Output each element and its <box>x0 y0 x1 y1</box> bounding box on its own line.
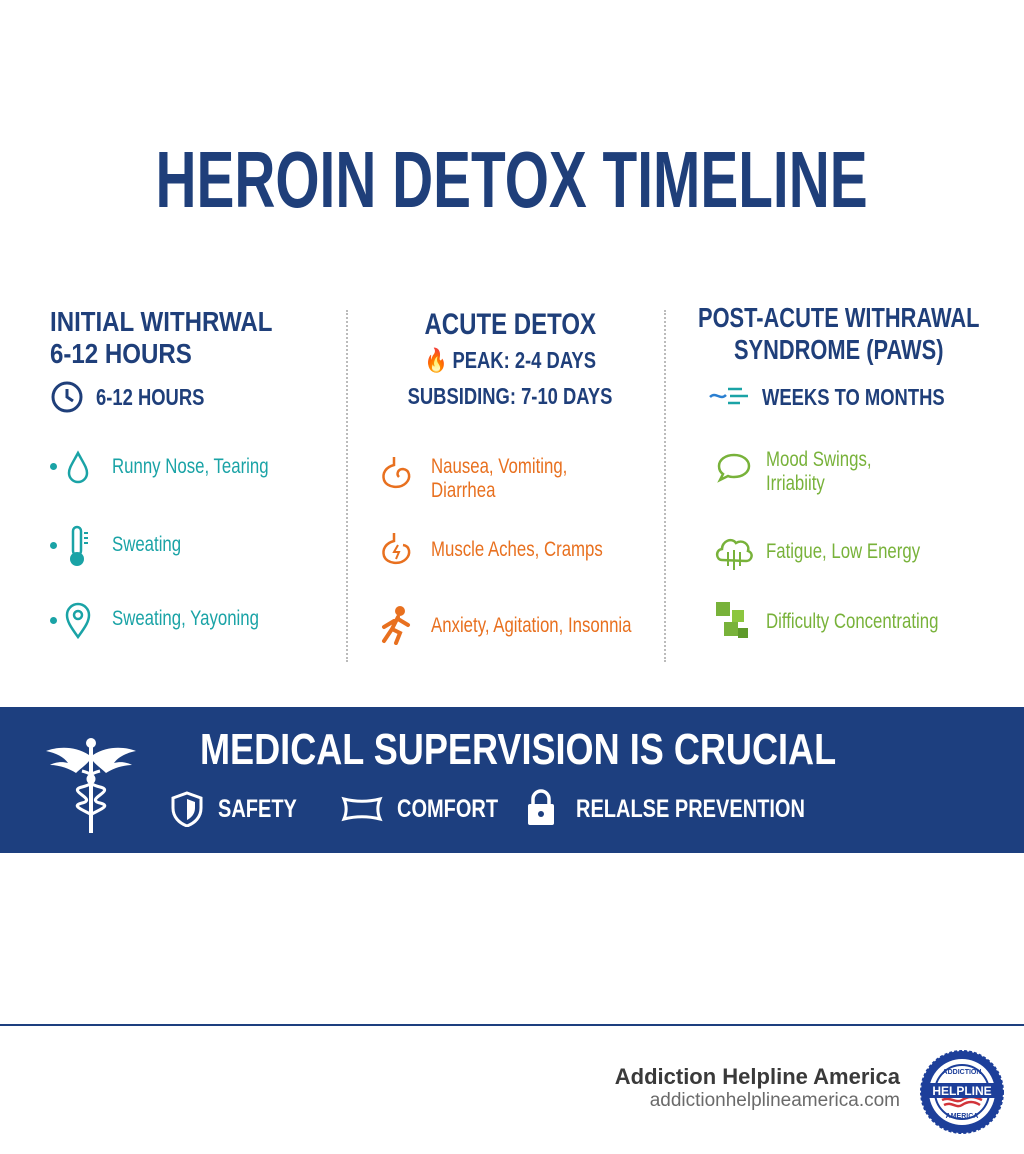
heading <box>50 306 272 369</box>
footer brand text: addictionhelplineamerica.com <box>650 1090 900 1111</box>
item: yawning: Sweating, Yayoning <box>112 607 259 630</box>
banner heading: MEDICAL SUPERVISION IS CRUCIAL <box>200 725 836 774</box>
icon: clock <box>52 382 82 412</box>
item: nausea: Diarrhea <box>431 479 495 502</box>
item: safety: SAFETY <box>218 795 297 823</box>
icon: caduceus <box>46 738 136 833</box>
item: nausea: Nausea, Vomiting, <box>431 455 567 478</box>
heading: INITIAL WITHRWAL <box>50 306 272 337</box>
panel: PAWS <box>698 302 979 638</box>
item: muscle aches <box>382 533 603 564</box>
heading: SYNDROME (PAWS) <box>734 334 943 365</box>
item: sweating <box>50 526 181 566</box>
title: HEROIN DETOX TIMELINE <box>156 135 868 224</box>
item: yawning <box>50 602 259 639</box>
heading: ACUTE DETOX <box>424 308 596 341</box>
item: relapse prevention <box>528 789 805 825</box>
logo <box>920 1050 1004 1134</box>
heading: POST-ACUTE WITHRAWAL <box>698 302 979 333</box>
banner: medical supervision <box>0 707 1024 853</box>
duration: WEEKS TO MONTHS <box>762 384 945 410</box>
item: safety <box>172 791 297 827</box>
footer brand text: Addiction Helpline America <box>615 1064 900 1089</box>
footer line <box>0 1024 1024 1026</box>
item: concentrating: Difficulty Concentrating <box>766 610 938 633</box>
subsiding: SUBSIDING: 7-10 DAYS <box>408 383 612 409</box>
item: fatigue: Fatigue, Low Energy <box>766 540 920 563</box>
item: concentrating <box>716 602 938 638</box>
icon: waves <box>709 388 748 404</box>
item: muscle aches: Muscle Aches, Cramps <box>431 538 603 561</box>
divider 1 <box>346 310 348 662</box>
heading <box>698 302 979 365</box>
heading: 6-12 HOURS <box>50 338 192 369</box>
item: mood: Mood Swings, <box>766 448 872 471</box>
logo: ADDICTION <box>943 1069 981 1076</box>
footer brand text <box>615 1064 900 1111</box>
panel: acute detox <box>382 308 632 645</box>
item: sweating: Sweating <box>112 533 181 556</box>
item: mood <box>717 448 872 495</box>
item: anxiety: Anxiety, Agitation, Insonnia <box>431 614 631 637</box>
item: comfort <box>342 795 498 823</box>
logo: HELPLINE <box>932 1084 992 1098</box>
peak: 🔥 PEAK: 2-4 DAYS <box>424 347 596 373</box>
item: runny nose <box>50 450 269 484</box>
divider 2 <box>664 310 666 662</box>
item: nausea <box>382 455 567 502</box>
duration: 6-12 HOURS <box>96 384 204 410</box>
item: mood: Irriabiity <box>766 472 825 495</box>
panel: initial withdrawal <box>50 306 272 639</box>
logo: AMERICA <box>946 1113 978 1120</box>
item: relapse prevention: RELALSE PREVENTION <box>576 795 805 823</box>
item: comfort: COMFORT <box>397 795 498 823</box>
item: fatigue <box>716 538 920 570</box>
item: runny nose: Runny Nose, Tearing <box>112 455 269 478</box>
item: anxiety <box>382 606 632 645</box>
